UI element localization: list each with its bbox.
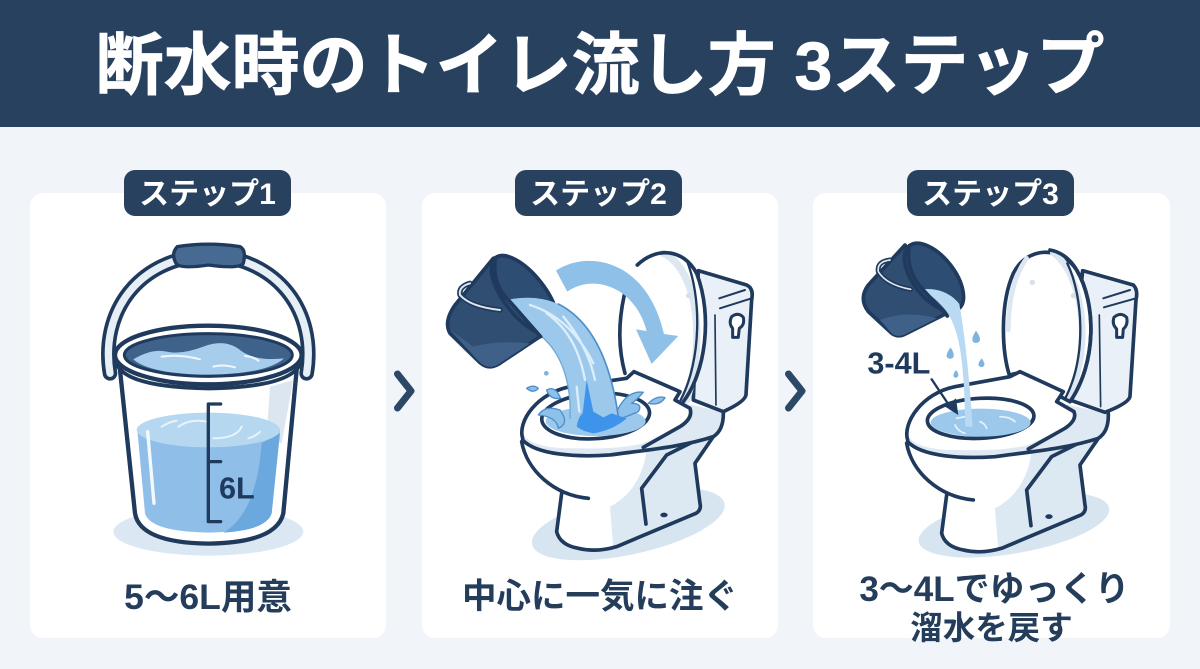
panel: step 1 card <box>30 193 386 638</box>
icon: bucket with water <box>108 244 308 556</box>
panel: step 3 card <box>813 193 1170 638</box>
arrow: chevron step 2 to 3 <box>788 374 802 408</box>
toilet lid <box>620 253 705 402</box>
toilet seat <box>521 372 691 448</box>
toilet pedestal and bowl <box>522 403 723 550</box>
title banner <box>0 0 1200 127</box>
bucket <box>448 245 570 367</box>
water stream <box>908 246 973 427</box>
step 2 label: ステップ2 <box>530 178 667 211</box>
arrow: pour direction <box>556 261 678 364</box>
step 2 label <box>515 170 682 216</box>
bucket handle <box>460 283 500 310</box>
arrow: chevron step 1 to 2 <box>398 374 411 408</box>
step 3 caption <box>859 570 1130 646</box>
water splashes <box>527 386 665 428</box>
toilet pedestal and bowl <box>907 405 1108 552</box>
label: 3-4L with pointer: 3-4L <box>867 346 930 380</box>
icon: toilet with bucket pouring <box>448 245 752 574</box>
toilet tank <box>693 271 752 412</box>
panel: step 2 card <box>422 193 778 638</box>
step 3 caption: 3〜4Lでゆっくり <box>859 570 1130 609</box>
step 1 label: ステップ1 <box>139 178 276 211</box>
bucket <box>863 233 975 336</box>
step 2 caption: 中心に一気に注ぐ <box>462 578 738 616</box>
step 3 caption: 溜水を戻す <box>910 610 1073 646</box>
icon: bucket with water: 6L <box>219 471 255 505</box>
icon: toilet with slow pour <box>863 233 1137 570</box>
water stream <box>495 258 627 433</box>
bowl water <box>926 396 1035 441</box>
toilet lid <box>1003 250 1091 402</box>
label: 3-4L with pointer <box>867 346 958 415</box>
bowl opening with water <box>540 390 651 442</box>
step 1 label <box>124 170 291 216</box>
toilet seat <box>906 372 1075 450</box>
step 1 caption: 5〜6L用意 <box>124 577 292 617</box>
step 3 label <box>907 170 1074 216</box>
bucket handle <box>878 260 911 289</box>
toilet tank <box>1070 271 1137 412</box>
title banner: 断水時のトイレ流し方 3ステップ <box>96 28 1104 104</box>
water drops <box>947 331 984 378</box>
step 3 label: ステップ3 <box>922 178 1059 211</box>
